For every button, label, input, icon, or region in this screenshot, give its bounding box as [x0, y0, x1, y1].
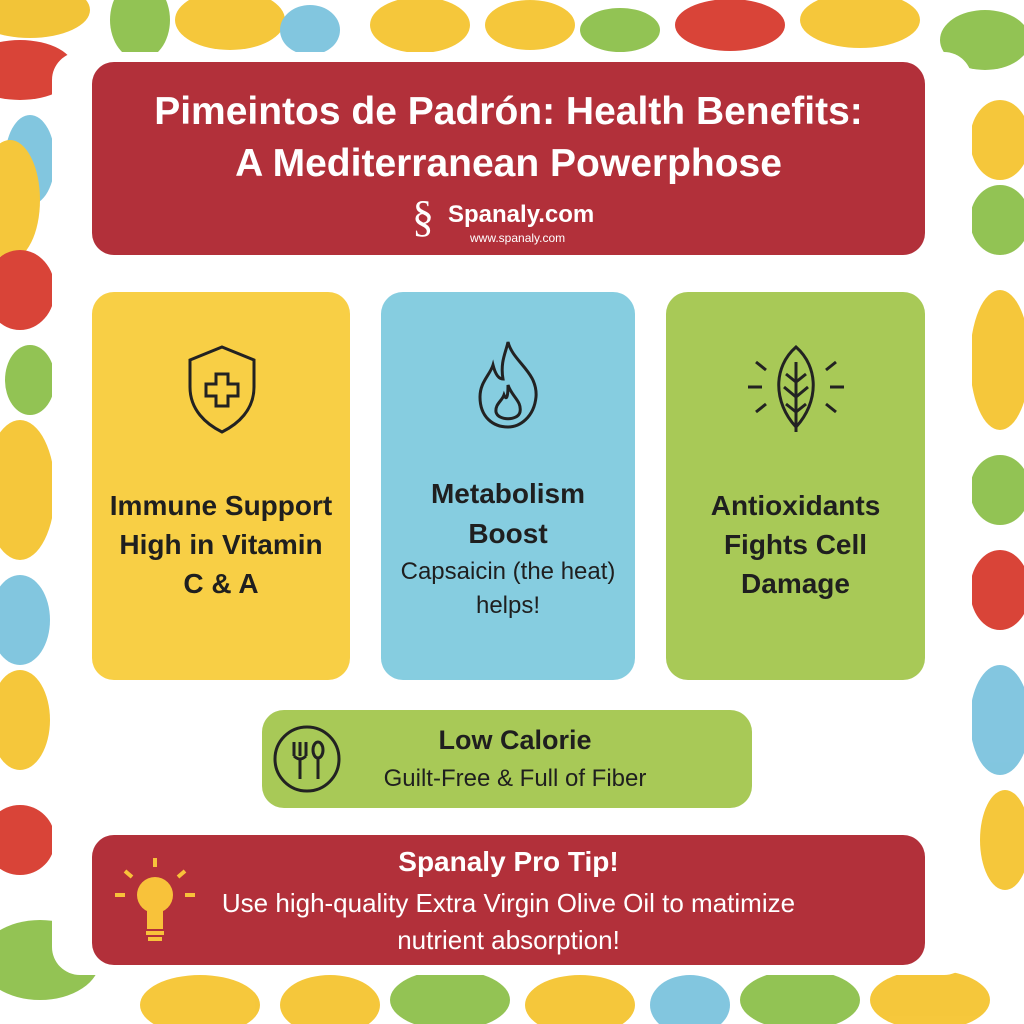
logo: www.spanaly.com [470, 231, 565, 245]
pro tip banner: nutrient absorption! [397, 925, 620, 955]
icon: fork and spoon [274, 726, 340, 792]
icon: flame [478, 342, 538, 428]
card: metabolism: Capsaicin (the heat) [401, 558, 615, 585]
logo [412, 192, 594, 245]
text: Damage [741, 568, 850, 599]
text: Low Calorie [438, 725, 592, 755]
text: Antioxidants [711, 490, 880, 521]
text: Spanaly Pro Tip! [398, 846, 619, 877]
card: immune support [92, 292, 350, 680]
pro tip banner [92, 835, 925, 965]
text: Metabolism [431, 478, 585, 509]
title: Pimeintos de Padrón: Health Benefits: [154, 90, 863, 133]
logo: § [412, 192, 434, 241]
text [110, 490, 332, 599]
text [711, 490, 880, 599]
card: low calorie: Guilt-Free & Full of Fiber [384, 765, 646, 792]
card: metabolism: helps! [476, 592, 540, 619]
title [154, 90, 863, 185]
pro tip banner: Use high-quality Extra Virgin Olive Oil to matimize [222, 888, 795, 918]
text: Boost [468, 518, 548, 549]
text: High in Vitamin [119, 529, 323, 560]
text: C & A [183, 568, 259, 599]
text [431, 478, 585, 549]
text: Immune Support [110, 490, 332, 521]
card: antioxidants [666, 292, 925, 680]
title: A Mediterranean Powerphose [235, 142, 782, 185]
title banner [92, 62, 925, 255]
icon: lightbulb [115, 858, 195, 941]
icon: leaf [748, 345, 844, 432]
icon: shield [188, 345, 256, 434]
logo: Spanaly.com [448, 201, 594, 228]
text: Fights Cell [724, 529, 867, 560]
card: metabolism [381, 292, 635, 680]
card: low calorie [262, 710, 752, 808]
